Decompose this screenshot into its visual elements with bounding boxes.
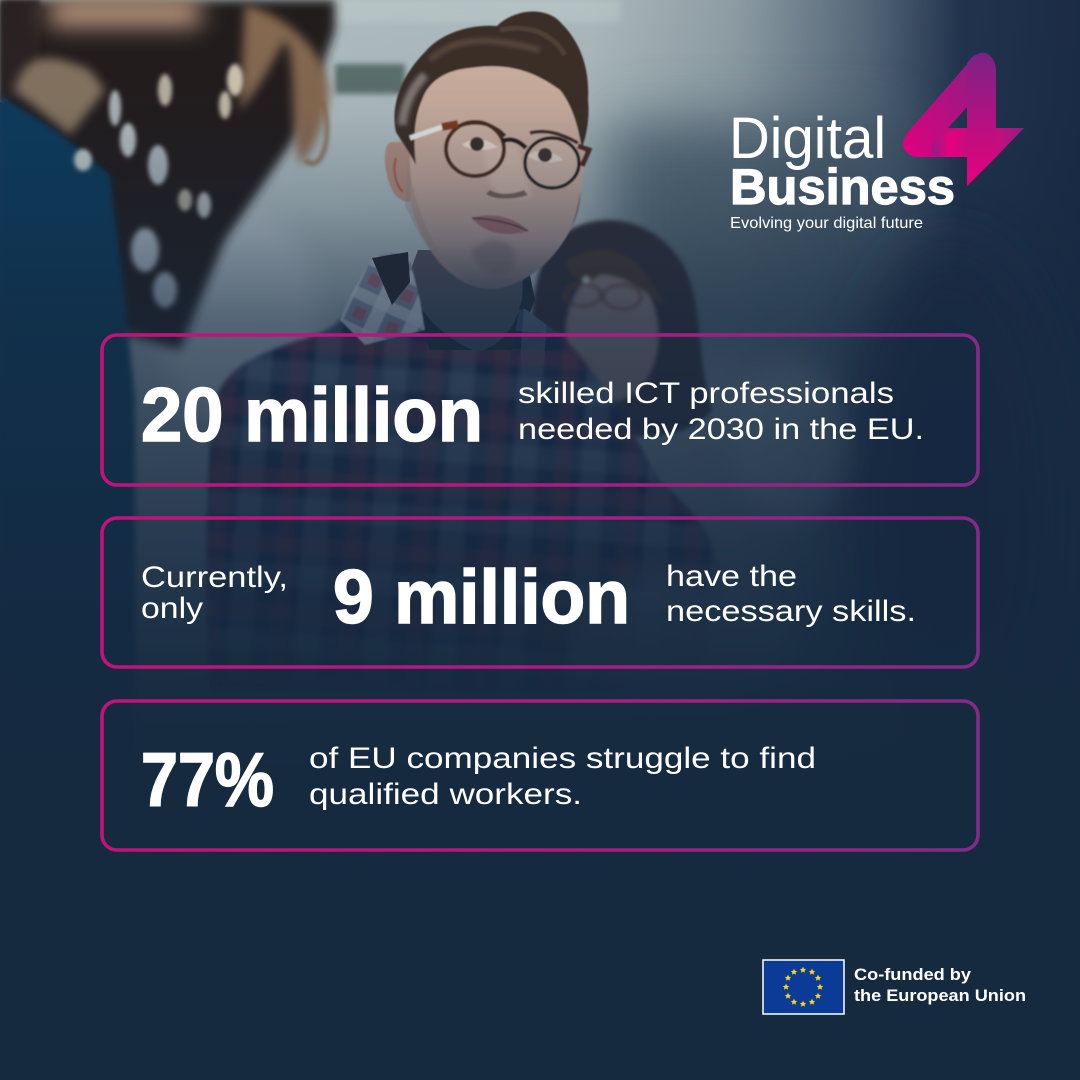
icon: EU flag — [763, 960, 844, 1014]
text: EU companies struggle — [309, 742, 816, 811]
text: skilled ICT professionals — [518, 377, 924, 446]
panel: 9 million — [102, 518, 978, 667]
man: shirt — [206, 250, 722, 690]
co-funded by the EU badge — [763, 960, 1026, 1014]
logo word: Digital: Digital — [729, 106, 886, 171]
text: Currently, only: only — [141, 592, 203, 625]
logo tagline: Evolving your digital future — [730, 215, 923, 232]
text: have the necessary skills: necessary skills. — [666, 595, 916, 628]
text: EU companies struggle: of EU companies struggle to find — [309, 742, 816, 775]
foreground hand blur — [570, 570, 790, 710]
panel: 77% of EU companies — [102, 701, 978, 850]
blurred colleague background right — [530, 220, 712, 436]
text: Currently, only — [141, 561, 288, 625]
man: glasses — [410, 122, 589, 188]
text: EU companies struggle: qualified workers. — [309, 778, 582, 811]
blurred colleague foreground left — [0, 0, 335, 880]
stat: 9 million: 9 million — [333, 555, 630, 640]
logo icon: stylised 4 — [903, 53, 1024, 186]
man: head — [385, 11, 589, 289]
text: have the necessary skills: have the — [666, 560, 797, 593]
text: skilled ICT professionals: skilled ICT professionals — [518, 377, 894, 410]
text: Co-funded by the European Union: the European Union — [854, 986, 1026, 1005]
stat: 77%: 77% — [141, 738, 274, 823]
panel: 20 million ICT professionals — [102, 335, 978, 485]
text: Co-funded by the European Union — [854, 965, 1026, 1005]
stat: 20 million: 20 million — [141, 373, 483, 458]
text: have the necessary skills — [666, 560, 916, 628]
logo word: Business: Business — [730, 159, 955, 215]
text: Currently, only: Currently, — [141, 561, 288, 594]
logo: Digital4Business — [729, 53, 1024, 232]
text: Co-funded by the European Union: Co-funded by — [854, 965, 972, 984]
text: skilled ICT professionals: needed by 2030 in the EU. — [518, 413, 924, 446]
